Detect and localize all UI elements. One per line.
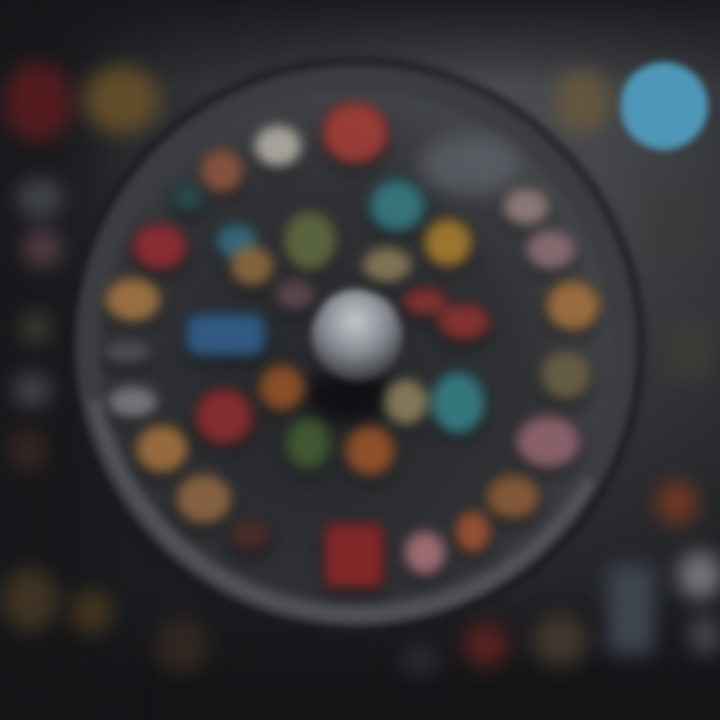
left column of objects: [2, 62, 210, 673]
bottom row of objects: [400, 614, 588, 676]
light patch inside wheel top right: [420, 135, 520, 195]
inner ring objects: [186, 180, 490, 476]
centre sphere: [305, 289, 403, 423]
wheel ring: [71, 61, 641, 631]
right column of objects: [608, 190, 720, 655]
top right objects: [554, 62, 708, 150]
outer ring objects: [104, 102, 600, 588]
icon: blue disc: [620, 62, 708, 150]
